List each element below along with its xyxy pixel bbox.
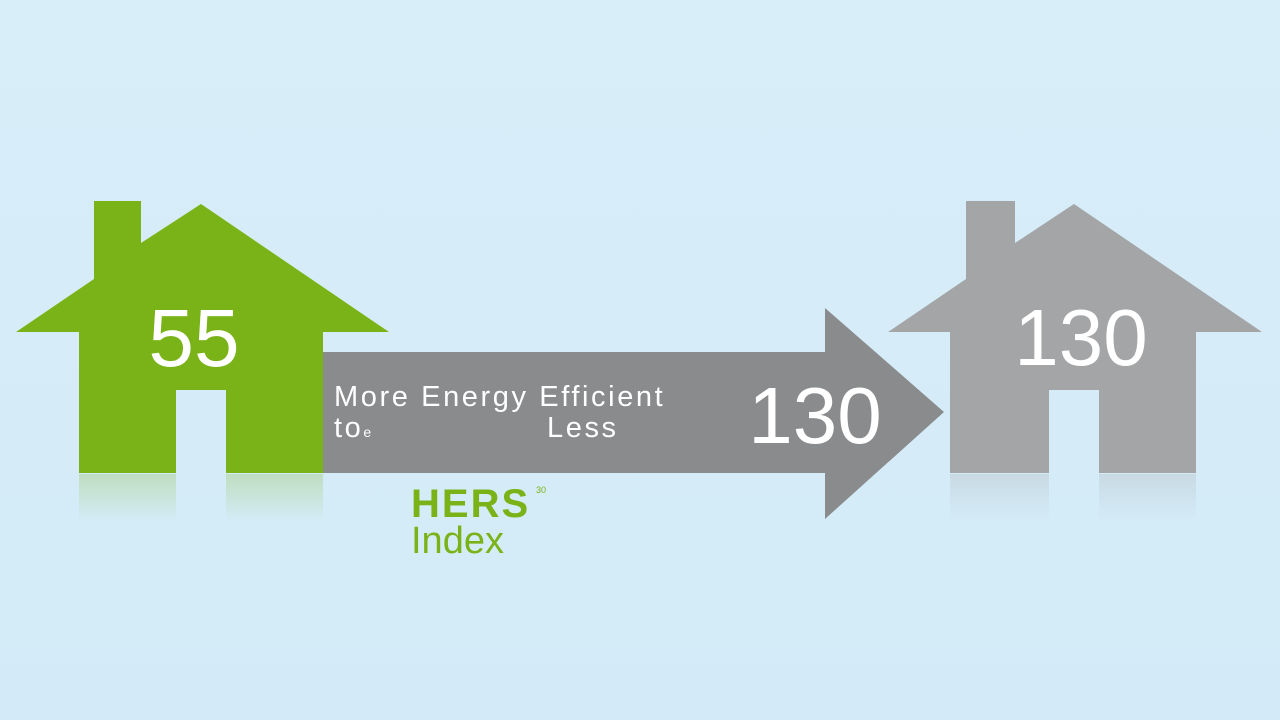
reflection: gray house: [950, 474, 1196, 522]
HERS Index logo: Index: [411, 520, 504, 562]
gray house number: 130: [1014, 293, 1148, 382]
HERS Index logo: 30: [536, 485, 546, 495]
gray house: [888, 201, 1262, 473]
green house: [16, 201, 389, 473]
HERS Index logo: HERS: [411, 482, 530, 526]
arrow text: [334, 381, 665, 444]
arrow: [323, 308, 944, 519]
arrow number: 130: [748, 371, 882, 460]
arrow text: toe: [334, 412, 374, 444]
arrow text: Less: [547, 412, 619, 444]
reflection: green house: [79, 474, 323, 522]
HERS Index logo: [411, 482, 546, 562]
green house number: 55: [148, 293, 240, 384]
arrow text: More Energy Efficient: [334, 381, 665, 413]
